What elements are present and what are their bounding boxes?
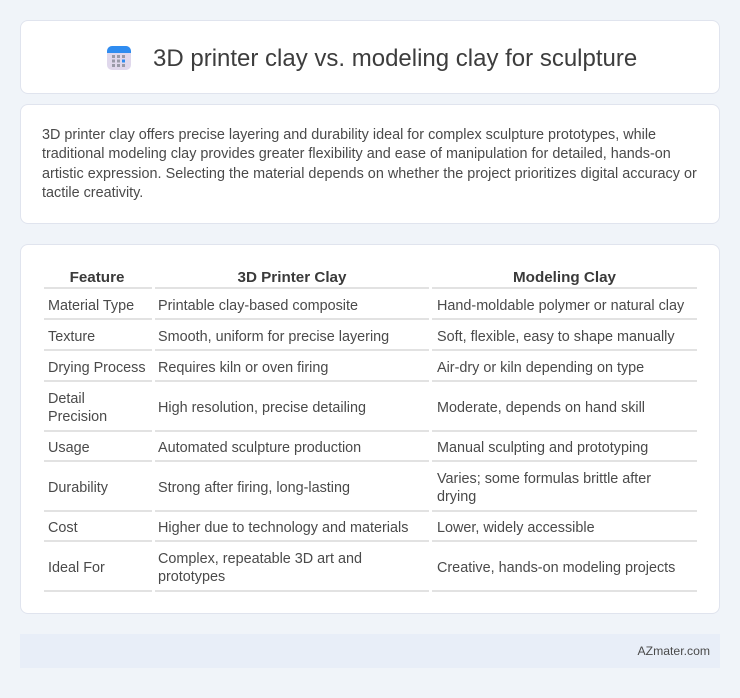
row: Durability: drying xyxy=(437,489,476,505)
row: Texture xyxy=(48,329,675,345)
panel: title card xyxy=(20,20,720,94)
row: Durability: Varies; some formulas brittle after xyxy=(437,471,651,487)
summary text: 3D printer clay offers precise layering and durability ideal for complex sculpture prototypes, while xyxy=(42,127,656,143)
row: Ideal For: Creative, hands-on modeling projects xyxy=(437,560,675,576)
footer bar xyxy=(20,634,720,668)
row: Drying Process: Air-dry or kiln depending on type xyxy=(437,360,644,376)
row: Cost xyxy=(48,520,595,536)
row: Detail Precision: Precision xyxy=(48,409,107,425)
table header: Modeling Clay xyxy=(513,269,616,286)
summary text: traditional modeling clay provides greater flexibility and ease of manipulation for detailed, hands-on xyxy=(42,146,671,162)
row: Cost: Higher due to technology and materials xyxy=(158,520,408,536)
row: Ideal For: prototypes xyxy=(158,569,225,585)
row: Material Type: Material Type xyxy=(48,298,134,314)
row: Drying Process: Requires kiln or oven firing xyxy=(158,360,328,376)
panel: summary card xyxy=(20,104,720,224)
icon: calendar xyxy=(107,46,131,70)
row: Texture: Soft, flexible, easy to shape manually xyxy=(437,329,675,345)
row: Detail Precision: Moderate, depends on hand skill xyxy=(437,400,645,416)
row: Material Type xyxy=(48,298,684,314)
row: Usage xyxy=(48,440,648,456)
row: Material Type: Hand-moldable polymer or natural clay xyxy=(437,298,684,314)
row: Detail Precision xyxy=(48,391,645,425)
panel: comparison table card xyxy=(20,244,720,614)
row: Usage: Manual sculpting and prototyping xyxy=(437,440,648,456)
row: Texture: Smooth, uniform for precise layering xyxy=(158,329,389,345)
summary text: artistic expression. Selecting the material depends on whether the project prioritizes digital accuracy or xyxy=(42,166,697,182)
row: Cost: Lower, widely accessible xyxy=(437,520,595,536)
row: Durability: Strong after firing, long-lasting xyxy=(158,480,350,496)
row: Material Type: Printable clay-based composite xyxy=(158,298,358,314)
summary text xyxy=(42,127,697,201)
row: Detail Precision: High resolution, precise detailing xyxy=(158,400,366,416)
row: Drying Process: Drying Process xyxy=(48,360,146,376)
row: Ideal For: Ideal For xyxy=(48,560,105,576)
row: Drying Process xyxy=(48,360,644,376)
table header xyxy=(70,269,616,286)
row: Usage: Usage xyxy=(48,440,90,456)
row: Durability: Durability xyxy=(48,480,108,496)
row: Cost: Cost xyxy=(48,520,78,536)
row: Durability xyxy=(48,471,651,505)
row: Texture: Texture xyxy=(48,329,95,345)
footer credit: AZmater.com xyxy=(638,644,710,658)
title: 3D printer clay vs. modeling clay for sculpture xyxy=(153,45,637,72)
row: Detail Precision: Detail xyxy=(48,391,85,407)
table header: Feature xyxy=(70,269,124,286)
summary text: tactile creativity. xyxy=(42,185,143,201)
comparison table xyxy=(44,269,697,592)
row: Ideal For xyxy=(48,551,675,585)
row: Usage: Automated sculpture production xyxy=(158,440,361,456)
row: Ideal For: Complex, repeatable 3D art and xyxy=(158,551,362,567)
table header: 3D Printer Clay xyxy=(238,269,346,286)
